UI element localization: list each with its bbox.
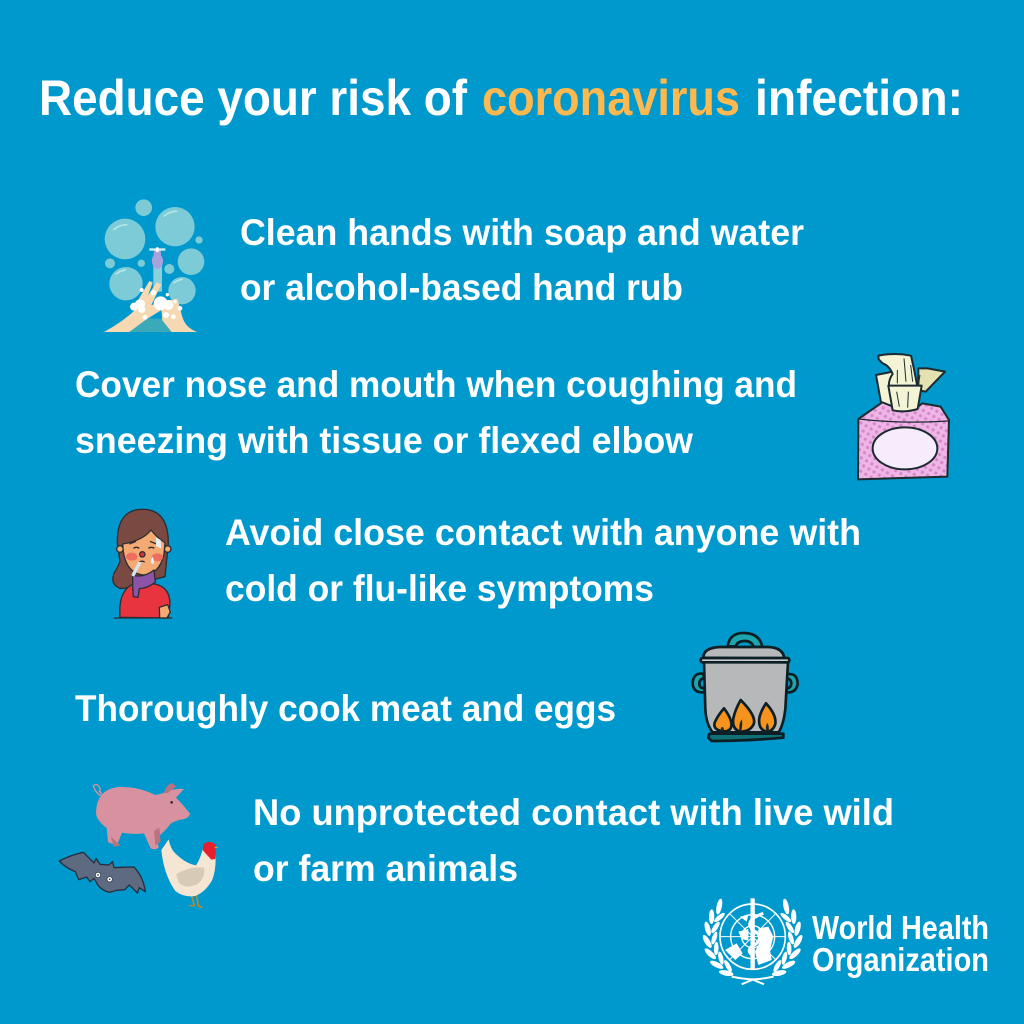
text: avoid close contact [225,512,861,609]
logo: World Health Organization [701,898,989,984]
text: clean hands: Clean hands with soap and water [240,212,804,253]
title: coronavirus [482,70,740,126]
text: cover nose and mouth [75,364,797,461]
icon: sick woman [113,509,172,618]
icon: tissue box [858,354,949,479]
wreath [701,898,804,977]
text: no unprotected contact: or farm animals [253,848,518,889]
emblem: globe with staff and laurel [701,898,804,984]
text: no unprotected contact [253,792,894,889]
title [39,70,963,126]
text: clean hands [240,212,804,308]
text: avoid close contact: Avoid close contact with anyone with [225,512,861,553]
text: cover nose and mouth: sneezing with tissue or flexed elbow [75,420,693,461]
text: clean hands: or alcohol-based hand rub [240,267,683,308]
wordmark [812,909,989,978]
icon: cooking pot on flames [693,633,798,741]
icon: hand washing with bubbles [104,199,204,332]
text: avoid close contact: cold or flu-like symptoms [225,568,654,609]
title: Reduce your risk of [39,70,467,126]
wordmark: Organization [812,941,989,978]
wordmark: World Health [812,909,989,946]
title: infection: [755,70,963,126]
text: no unprotected contact: No unprotected contact with live wild [253,792,894,833]
text: cover nose and mouth: Cover nose and mouth when coughing and [75,364,797,405]
text: cook meat and eggs: Thoroughly cook meat and eggs [75,688,616,729]
icon: pig, bat and chicken [59,783,219,908]
